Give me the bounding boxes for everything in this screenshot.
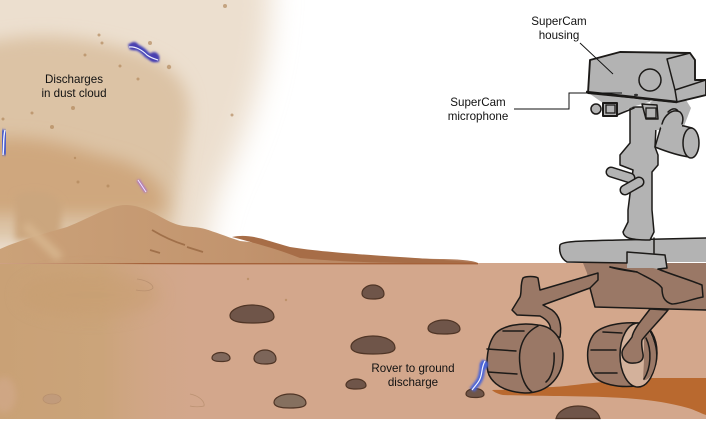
- SuperCam housing: [588, 52, 706, 102]
- under-housing fill: [590, 94, 691, 130]
- lightning: cloud left: [3, 130, 5, 155]
- rover shadow: [492, 378, 706, 415]
- lightning: cloud small: [138, 180, 146, 192]
- label: rover to ground discharge: Rover to ground: [371, 362, 455, 375]
- label: housing: SuperCam: [531, 15, 587, 28]
- mast: [620, 107, 658, 240]
- lightning: cloud upper: [129, 42, 159, 62]
- dust cloud upper: [0, 0, 284, 249]
- label: discharges in dust cloud: in dust cloud: [41, 87, 107, 100]
- lightning: rover to ground: [472, 361, 488, 390]
- rocks: [212, 285, 600, 418]
- side cylinder: [655, 123, 697, 157]
- label: housing: housing: [539, 29, 579, 42]
- label: discharges in dust cloud: Discharges: [45, 73, 103, 86]
- label: microphone: SuperCam: [450, 96, 506, 109]
- small dust-buried rocks: [43, 279, 204, 407]
- rover body: [583, 263, 706, 310]
- rover: [487, 52, 706, 393]
- leader: microphone: [514, 93, 622, 109]
- dust cloud lower: [0, 4, 287, 419]
- ground: [0, 263, 706, 419]
- front rocker arm: [512, 273, 598, 337]
- camera units: [591, 104, 601, 114]
- rear leg: [622, 309, 668, 363]
- dust specks: [2, 4, 287, 301]
- label: rover to ground discharge: discharge: [388, 376, 438, 389]
- leader: housing: [580, 43, 613, 74]
- suspension arm right: [610, 267, 703, 304]
- rear wheel: [588, 323, 657, 387]
- front wheel: [487, 324, 563, 393]
- distant hills: [0, 205, 478, 263]
- mast arms: [611, 172, 630, 178]
- label: microphone: microphone: [448, 110, 508, 123]
- chassis deck: [560, 238, 706, 269]
